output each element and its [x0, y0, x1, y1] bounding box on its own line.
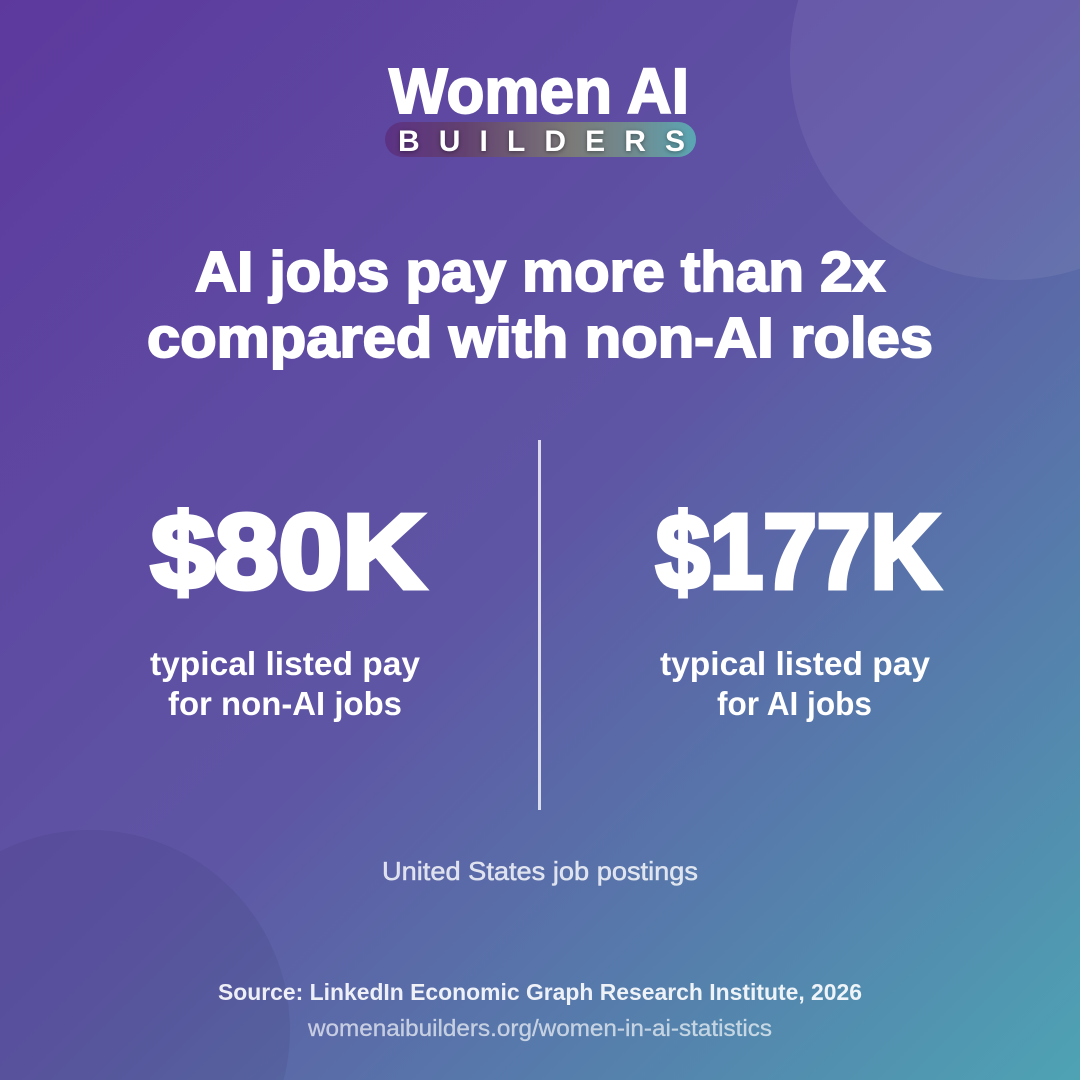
heading: compared with non-AI roles [147, 306, 933, 370]
divider [538, 440, 541, 810]
stat: non-AI jobs [150, 493, 425, 722]
stat label: AI: typical listed pay [660, 645, 931, 682]
stat label: non-AI: typical listed pay [150, 645, 421, 682]
heading: AI jobs pay more than 2x [195, 240, 885, 304]
logo wordmark: Women AI [389, 55, 689, 127]
stat label: AI [660, 645, 931, 722]
stat label: AI: for AI jobs [717, 685, 872, 722]
website URL: womenaibuilders.org/women-in-ai-statistics [307, 1015, 772, 1041]
stat value: $80K: $80K [151, 493, 425, 611]
geography note: United States job postings [382, 856, 698, 886]
logo pill text: BUILDERS [398, 125, 685, 158]
logo: Women AI Builders [385, 55, 696, 158]
heading [147, 240, 933, 370]
source: Source: LinkedIn Economic Graph Research Institute, 2026 [218, 979, 862, 1005]
stat label: non-AI [150, 645, 421, 722]
stat label: non-AI: for non-AI jobs [168, 685, 402, 722]
logo pill [385, 122, 696, 157]
decorative circle: bottom left [0, 830, 290, 1080]
stat: AI jobs [656, 493, 940, 722]
decorative circle: top right [790, 0, 1080, 280]
stat value: $177K: $177K [656, 493, 940, 611]
